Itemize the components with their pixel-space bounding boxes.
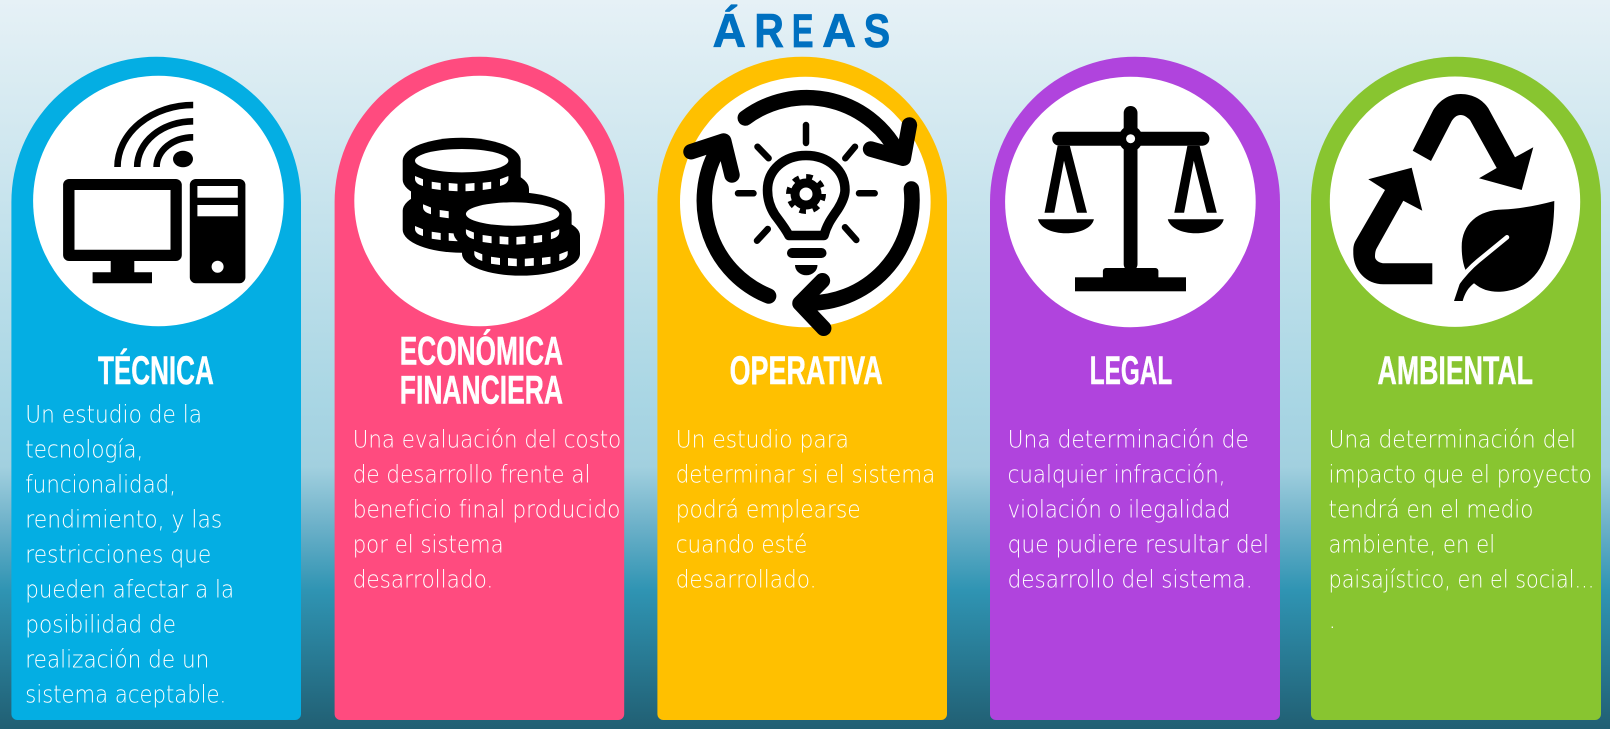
description: sistema aceptable. bbox=[25, 681, 226, 709]
heading: TÉCNICA bbox=[98, 349, 214, 393]
description: Un estudio de la bbox=[25, 401, 202, 429]
description: realización de un bbox=[25, 646, 209, 674]
title: A bbox=[822, 4, 856, 57]
title: S bbox=[864, 4, 890, 57]
description: desarrollo del sistema. bbox=[1008, 566, 1253, 594]
description: desarrollado. bbox=[676, 566, 816, 594]
description: posibilidad de bbox=[25, 611, 176, 639]
icon: recycling arrows and leaf bbox=[1353, 94, 1554, 301]
title: R bbox=[754, 4, 784, 57]
icon circle bbox=[33, 76, 284, 326]
description bbox=[353, 426, 621, 594]
description bbox=[676, 426, 935, 594]
description: cualquier infracción, bbox=[1008, 461, 1226, 489]
description bbox=[1008, 426, 1269, 594]
icon circle bbox=[1005, 77, 1256, 327]
description: rendimiento, y las bbox=[25, 506, 222, 534]
icon circle bbox=[354, 76, 605, 326]
heading: OPERATIVA bbox=[730, 349, 883, 393]
panel: técnica bbox=[11, 57, 301, 720]
description: violación o ilegalidad bbox=[1008, 496, 1230, 524]
description: Un estudio para bbox=[676, 426, 849, 454]
description: Una determinación de bbox=[1008, 426, 1249, 454]
panel: ambiental bbox=[1311, 57, 1601, 720]
description: que pudiere resultar del bbox=[1008, 531, 1269, 559]
description bbox=[1328, 426, 1594, 634]
icon: balance scale bbox=[1038, 106, 1224, 291]
icon: coins bbox=[403, 138, 580, 276]
icon: light bulb with cycle arrows bbox=[691, 98, 912, 328]
description: determinar si el sistema bbox=[676, 461, 935, 489]
description: de desarrollo frente al bbox=[353, 461, 590, 489]
icon: computer with wifi bbox=[63, 105, 245, 283]
description: Una evaluación del costo bbox=[353, 426, 621, 454]
description: ambiente, en el bbox=[1328, 531, 1495, 559]
icon circle bbox=[680, 77, 931, 327]
icon circle bbox=[1330, 76, 1580, 327]
description: por el sistema bbox=[353, 531, 504, 559]
card shape bbox=[990, 57, 1280, 720]
heading: AMBIENTAL bbox=[1378, 349, 1533, 393]
description: cuando esté bbox=[676, 531, 807, 559]
heading: ECONÓMICA bbox=[400, 330, 563, 374]
description: podrá emplearse bbox=[676, 496, 861, 524]
heading: FINANCIERA bbox=[400, 368, 563, 412]
heading: LEGAL bbox=[1090, 349, 1172, 393]
description: pueden afectar a la bbox=[25, 576, 234, 604]
card shape bbox=[335, 57, 624, 720]
title: E bbox=[792, 4, 814, 57]
description bbox=[25, 401, 234, 709]
heading bbox=[400, 330, 563, 412]
description: desarrollado. bbox=[353, 566, 493, 594]
title: Á bbox=[713, 4, 746, 57]
card shape bbox=[11, 57, 301, 720]
title bbox=[713, 4, 890, 57]
description: beneficio final producido bbox=[353, 496, 620, 524]
panel: operativa bbox=[657, 57, 947, 720]
description: tecnología, bbox=[25, 436, 143, 464]
description: restricciones que bbox=[25, 541, 211, 569]
description: Una determinación del bbox=[1328, 426, 1576, 454]
panel: legal bbox=[990, 57, 1280, 720]
description: funcionalidad, bbox=[25, 471, 176, 499]
description: . bbox=[1328, 606, 1336, 634]
panel: económica financiera bbox=[335, 57, 624, 720]
description: tendrá en el medio bbox=[1328, 496, 1534, 524]
card shape bbox=[1311, 57, 1601, 720]
card shape bbox=[657, 57, 947, 720]
